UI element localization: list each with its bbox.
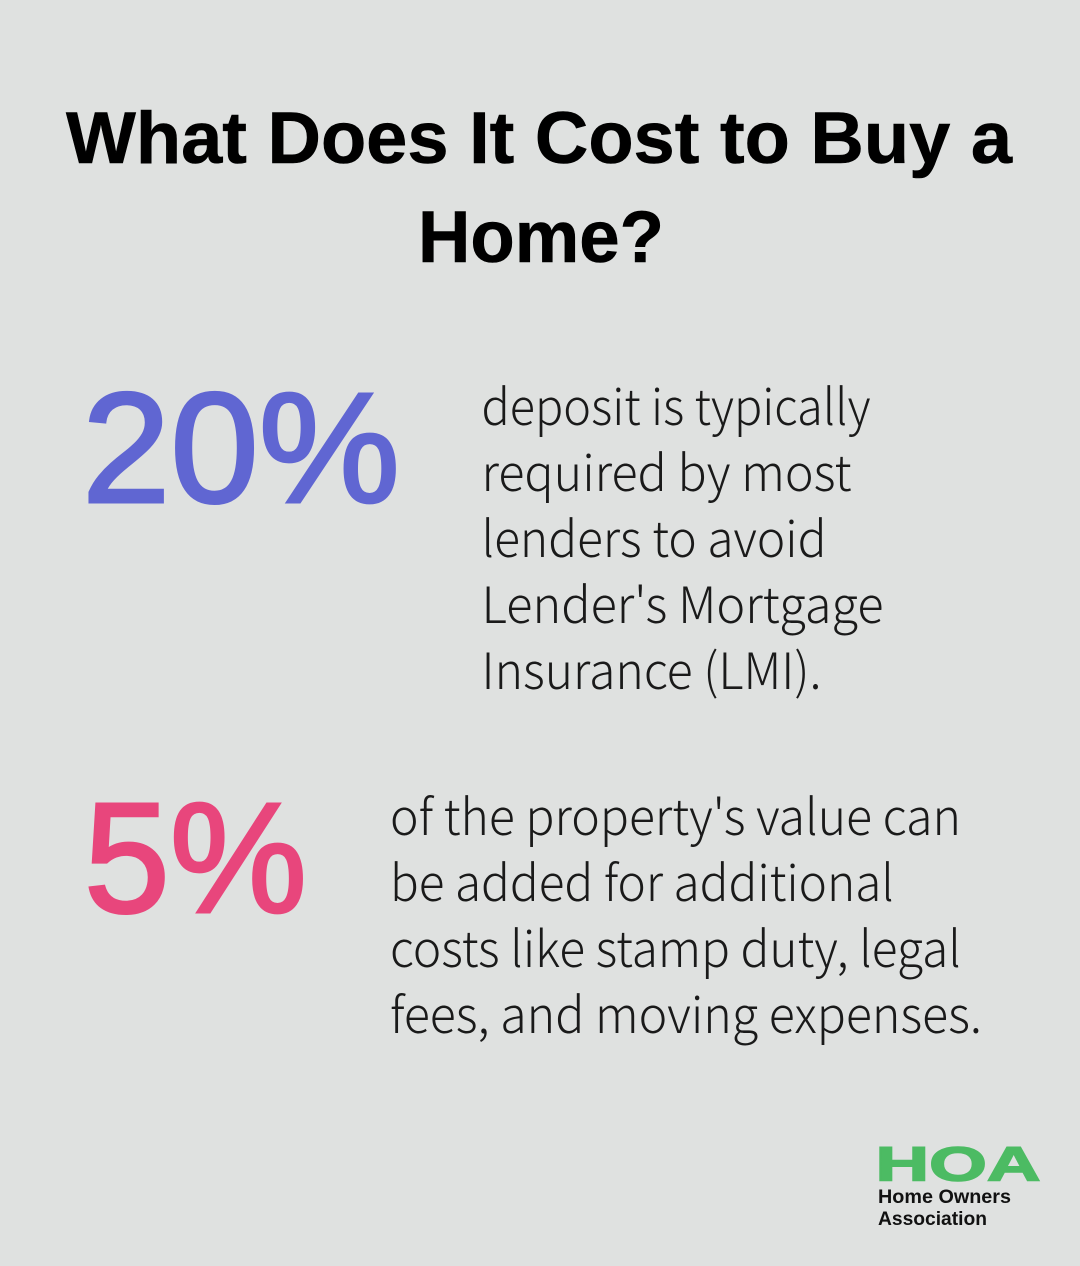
- text block: additional costs description: [390, 778, 982, 1048]
- panel: 20% deposit: [82, 361, 884, 704]
- text block: additional costs description: of the property's value can: [390, 778, 961, 850]
- text block: deposit description: Insurance (LMI).: [482, 632, 822, 704]
- logo: HOA Home Owners Association: Home Owners: [878, 1186, 1011, 1208]
- text block: deposit description: required by most: [482, 434, 852, 506]
- logo: HOA Home Owners Association: Association: [878, 1208, 987, 1230]
- logo: HOA Home Owners Association: HOA: [876, 1138, 1040, 1192]
- title: Home?: [418, 197, 664, 278]
- title: What Does It Cost to Buy a: [66, 98, 1013, 179]
- text block: additional costs description: costs like stamp duty, legal: [390, 910, 961, 982]
- panel: 5% additional costs: [84, 771, 982, 1048]
- title: [66, 98, 1013, 278]
- text block: deposit description: [482, 368, 884, 704]
- stat: 5%: 5%: [84, 771, 307, 946]
- text block: deposit description: Lender's Mortgage: [482, 566, 884, 638]
- text block: additional costs description: be added for additional: [390, 844, 894, 916]
- text block: deposit description: deposit is typically: [482, 368, 870, 440]
- text block: deposit description: lenders to avoid: [482, 500, 826, 572]
- text block: additional costs description: fees, and moving expenses.: [390, 976, 982, 1048]
- logo: HOA Home Owners Association: [876, 1138, 1040, 1230]
- stat: 20%: 20%: [82, 361, 400, 536]
